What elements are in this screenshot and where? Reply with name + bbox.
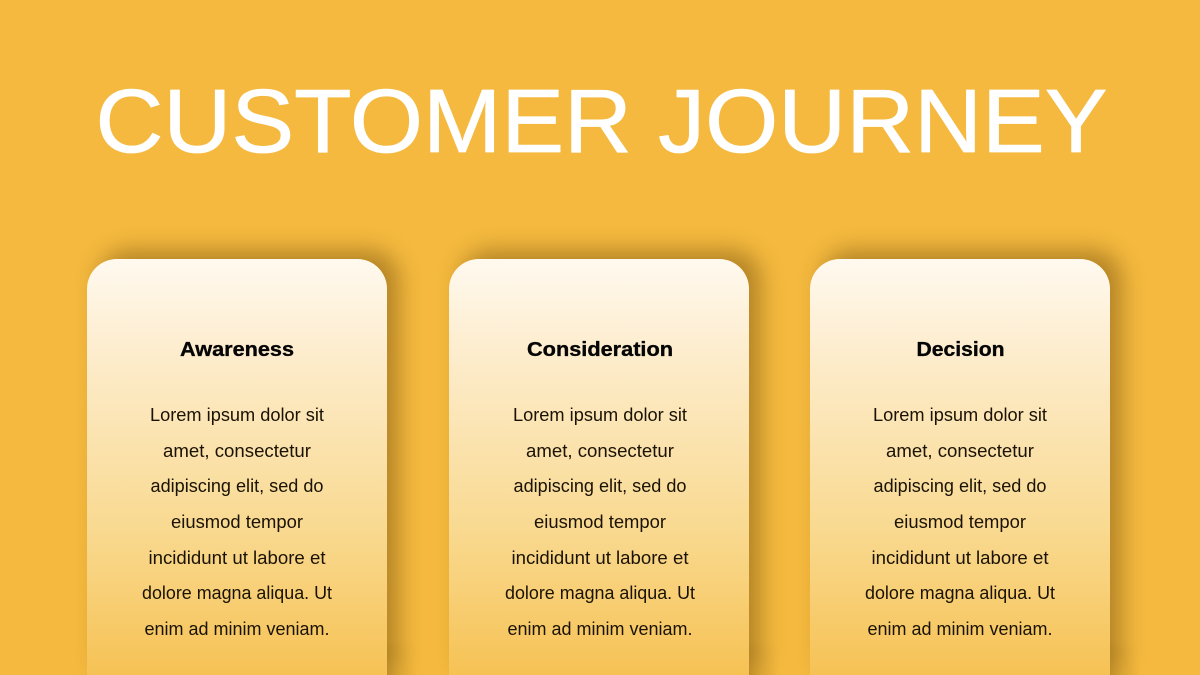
- text block: consideration: amet, consectetur: [526, 441, 674, 461]
- text block: decision: [865, 405, 1055, 639]
- text block: awareness: incididunt ut labore et: [148, 548, 326, 568]
- text block: consideration: Lorem ipsum dolor sit: [513, 405, 687, 425]
- heading: awareness: Awareness: [180, 339, 294, 361]
- heading: consideration: Consideration: [527, 339, 673, 361]
- text block: awareness: [142, 405, 332, 639]
- text block: awareness: Lorem ipsum dolor sit: [150, 405, 324, 425]
- text block: awareness: adipiscing elit, sed do: [150, 476, 324, 496]
- text block: consideration: [505, 405, 695, 639]
- heading: decision: Decision: [916, 339, 1004, 361]
- text block: decision: incididunt ut labore et: [872, 548, 1048, 568]
- text block: decision: amet, consectetur: [886, 441, 1034, 461]
- text block: awareness: dolore magna aliqua. Ut: [142, 583, 332, 603]
- text block: decision: eiusmod tempor: [894, 512, 1026, 532]
- text block: consideration: dolore magna aliqua. Ut: [505, 583, 695, 603]
- title: CUSTOMER JOURNEY: [96, 72, 1108, 172]
- panel: decision card: [810, 259, 1110, 675]
- text block: consideration: adipiscing elit, sed do: [514, 476, 686, 496]
- text block: awareness: eiusmod tempor: [171, 512, 303, 532]
- text block: decision: enim ad minim veniam.: [868, 619, 1052, 639]
- text block: awareness: enim ad minim veniam.: [144, 619, 330, 639]
- panel: awareness card: [87, 259, 387, 675]
- text block: consideration: incididunt ut labore et: [512, 548, 688, 568]
- text block: awareness: amet, consectetur: [163, 441, 311, 461]
- text block: decision: adipiscing elit, sed do: [874, 476, 1046, 496]
- text block: decision: dolore magna aliqua. Ut: [865, 583, 1055, 603]
- text block: consideration: eiusmod tempor: [534, 512, 666, 532]
- text block: consideration: enim ad minim veniam.: [508, 619, 692, 639]
- panel: consideration card: [449, 259, 749, 675]
- text block: decision: Lorem ipsum dolor sit: [873, 405, 1047, 425]
